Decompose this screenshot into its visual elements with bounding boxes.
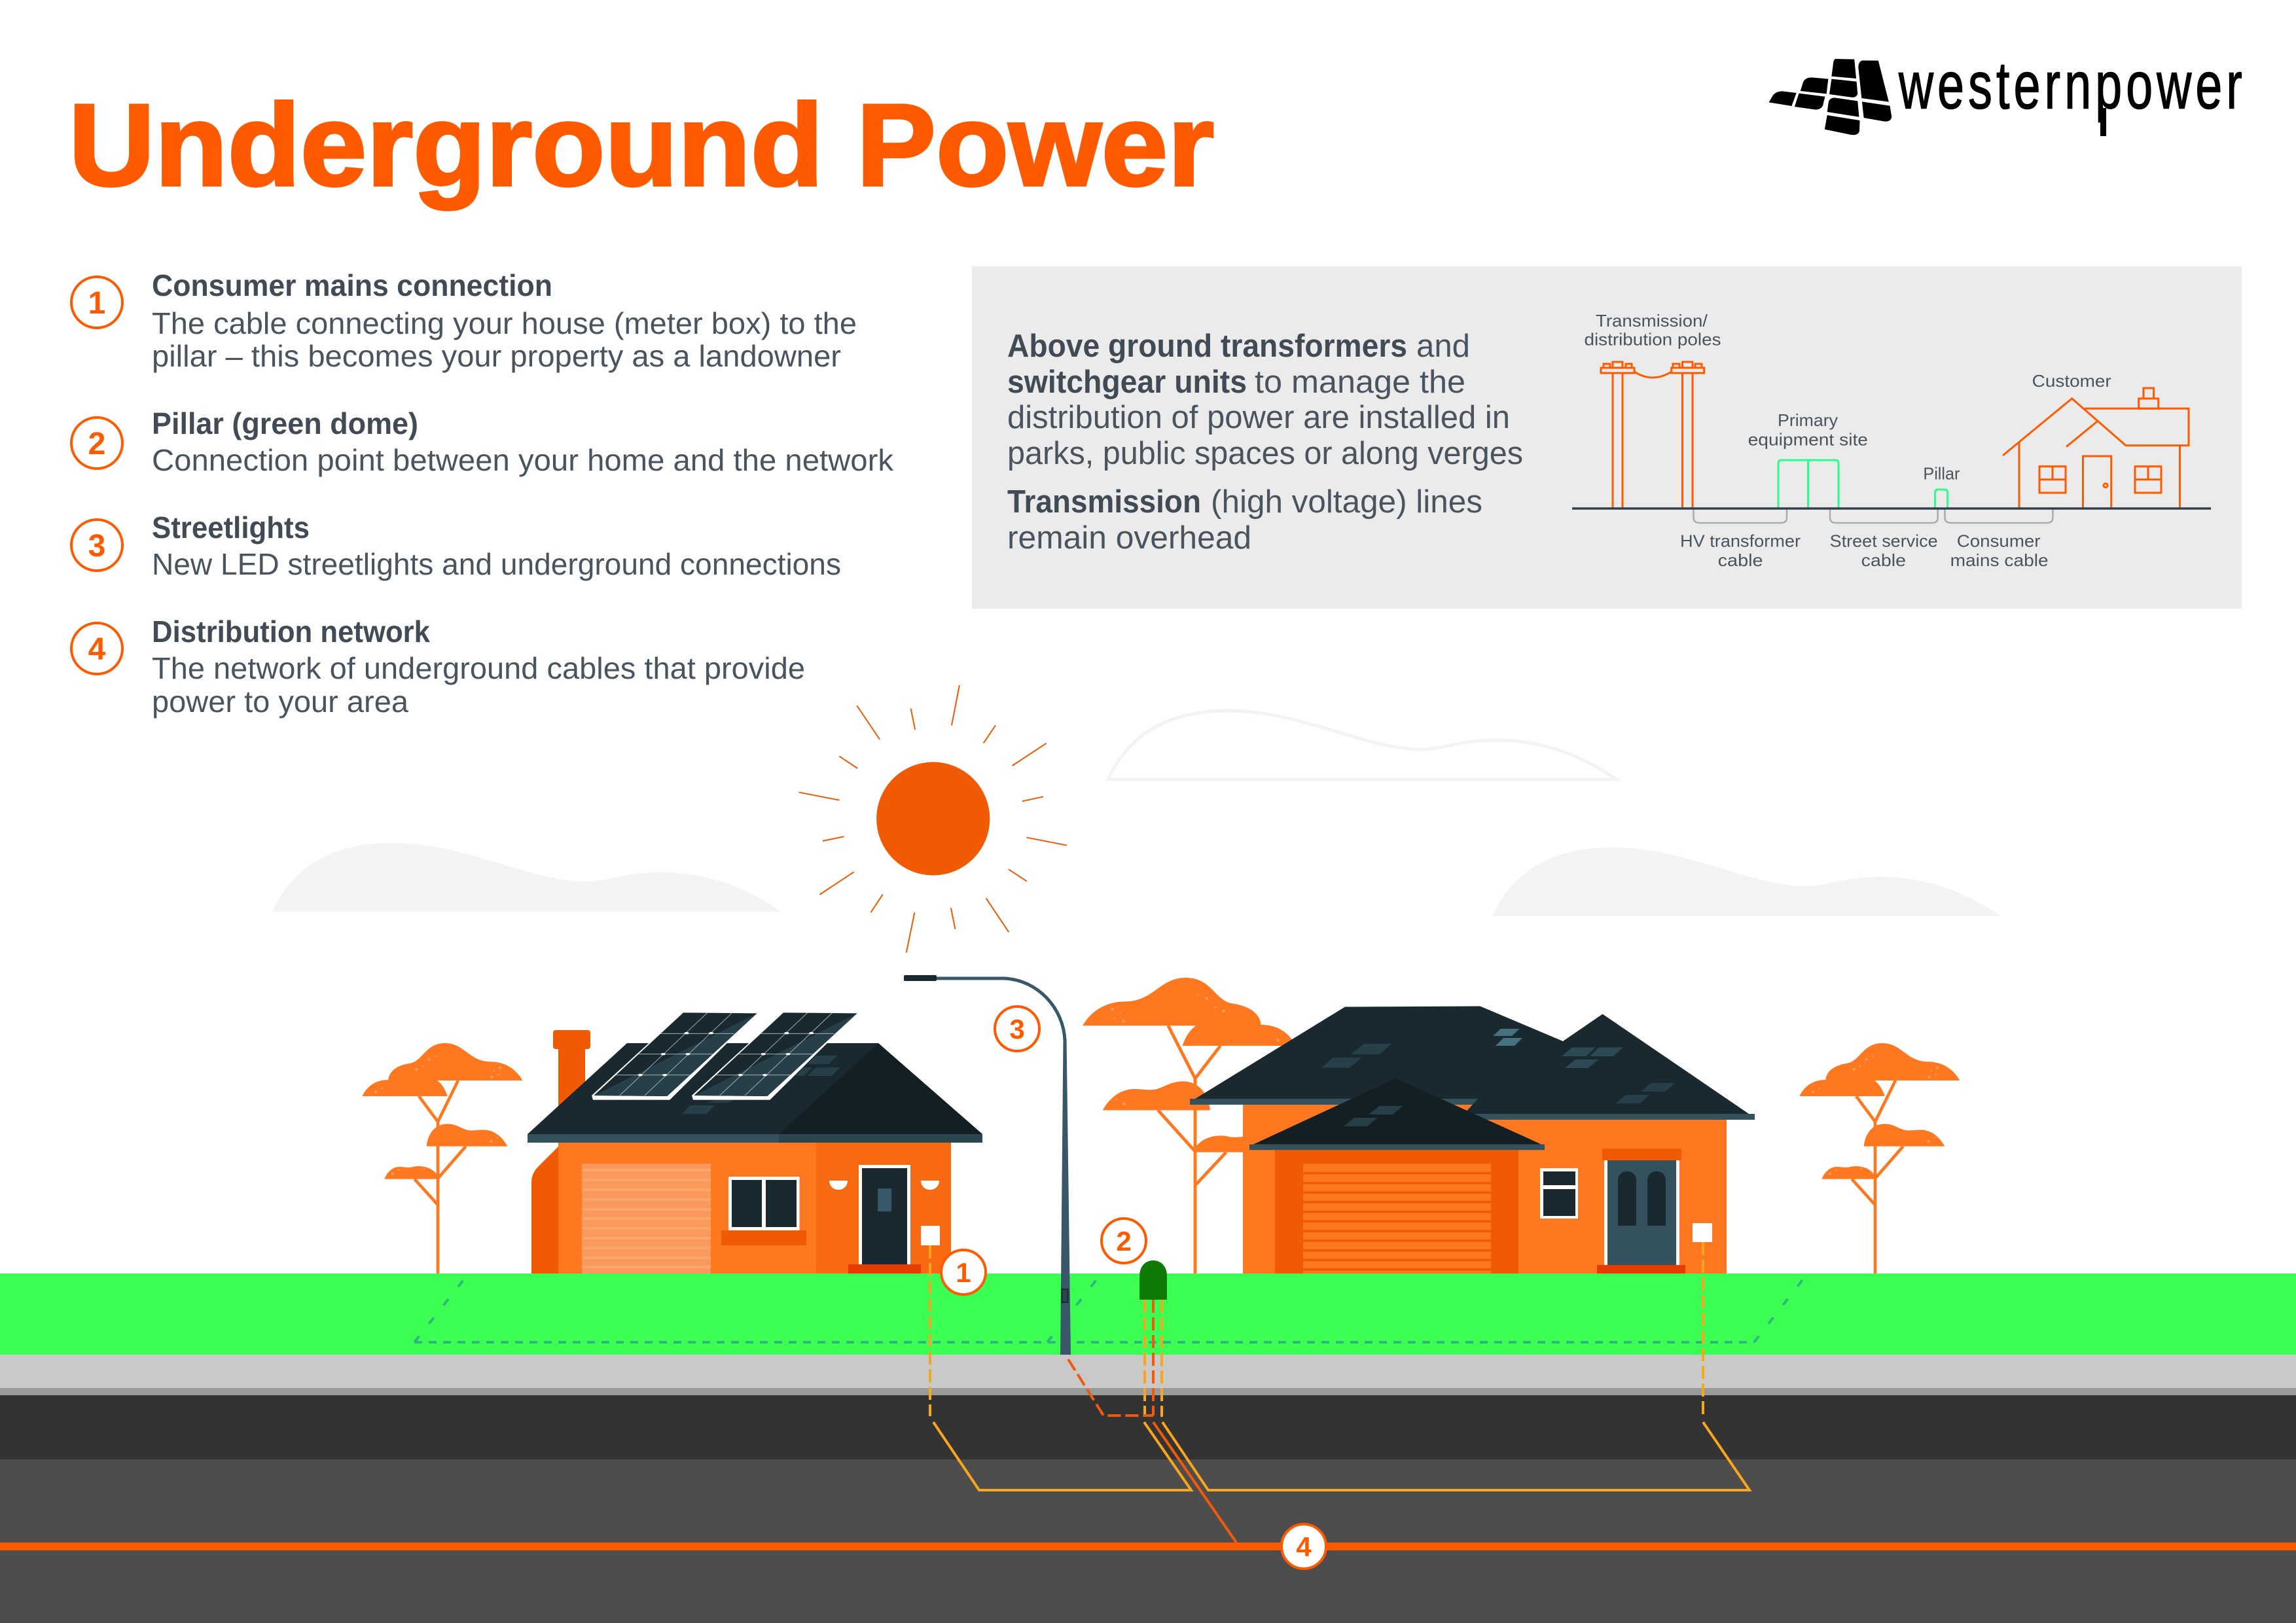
tree: middle xyxy=(1083,978,1296,1274)
panel text: remain overhead xyxy=(1007,520,1251,556)
callout 2: 2 xyxy=(1116,1226,1132,1257)
diagram labels: equipment site xyxy=(1748,430,1868,450)
door step xyxy=(848,1264,921,1274)
sun disc xyxy=(876,762,990,876)
legend item 2: 2 xyxy=(88,427,105,461)
panel text: Above ground transformers xyxy=(1007,329,1407,364)
diagram: ground line xyxy=(1572,507,2211,510)
lawn xyxy=(0,1274,2296,1355)
solar panels xyxy=(592,1012,857,1100)
legend item 3: New LED streetlights and underground connections xyxy=(152,547,841,581)
cable from right house xyxy=(1702,1242,1704,1417)
panel background xyxy=(972,266,2242,609)
gable roof xyxy=(1253,1079,1541,1145)
logo wordmark: westernpower xyxy=(1898,48,2242,123)
roof fascia shaded xyxy=(779,1134,982,1143)
legend item 3: Streetlights xyxy=(152,510,310,544)
cloud: outline xyxy=(1108,711,1617,779)
roof xyxy=(528,1043,982,1134)
legend item 1: The cable connecting your house (meter box) to the xyxy=(152,306,857,340)
gable fascia xyxy=(1249,1145,1545,1150)
diagram labels: Transmission/ xyxy=(1596,311,1708,330)
panel text xyxy=(1007,329,1523,556)
chimney xyxy=(553,1030,590,1113)
front door xyxy=(859,1165,910,1264)
legend item 3 xyxy=(71,510,841,581)
logo: western power xyxy=(1769,48,2242,136)
diagram labels: Customer xyxy=(2032,371,2111,391)
callout 2 xyxy=(1102,1219,1146,1263)
legend item 4: The network of underground cables that provide xyxy=(152,651,805,685)
roof tiles xyxy=(682,1056,840,1114)
panel text: (high voltage) lines xyxy=(1211,484,1482,520)
ground layers xyxy=(0,1274,2296,1623)
panel text: parks, public spaces or along verges xyxy=(1007,436,1523,471)
pillar dashes xyxy=(1145,1300,1162,1417)
legend item 2: Connection point between your home and the network xyxy=(152,443,894,477)
left side wall xyxy=(531,1147,558,1274)
callout 1 xyxy=(941,1250,986,1294)
streetlight pole xyxy=(1060,1039,1071,1355)
legend item 4: Distribution network xyxy=(152,615,430,649)
cloud: left xyxy=(272,843,781,912)
garage recess xyxy=(1275,1150,1518,1274)
pole hatch xyxy=(1062,1289,1068,1302)
legend item 1: pillar – this becomes your property as a landowner xyxy=(152,339,841,373)
lintel xyxy=(1602,1149,1681,1160)
panel text: switchgear units xyxy=(1007,365,1247,400)
window xyxy=(1540,1168,1578,1219)
panel text: and xyxy=(1416,329,1470,364)
distribution cable xyxy=(0,1543,2296,1550)
sun rays xyxy=(799,685,1067,953)
shaded wall xyxy=(816,1143,951,1274)
diagram labels: cable xyxy=(1861,550,1906,570)
panel text: Transmission xyxy=(1007,484,1201,520)
solar panel 1 xyxy=(592,1012,757,1100)
network diagram xyxy=(1572,311,2211,570)
tree: right xyxy=(1799,1043,1960,1274)
logo descender xyxy=(2100,108,2106,136)
wall lights xyxy=(829,1181,939,1190)
house: left xyxy=(528,1012,982,1274)
window xyxy=(728,1177,800,1230)
legend list xyxy=(71,268,894,719)
legend item 1: Consumer mains connection xyxy=(152,268,552,302)
front door xyxy=(1604,1160,1679,1265)
window box xyxy=(721,1230,806,1245)
legend item 4: power to your area xyxy=(152,685,408,719)
road surface xyxy=(0,1395,2296,1459)
meter box xyxy=(1693,1223,1712,1242)
panel text: distribution of power are installed in xyxy=(1007,400,1510,435)
diagram labels: mains cable xyxy=(1950,550,2049,570)
roof shade xyxy=(779,1043,982,1134)
callout 3: 3 xyxy=(1009,1014,1025,1044)
panel text: to manage the xyxy=(1255,365,1465,400)
main roof xyxy=(1195,1007,1749,1114)
garage door xyxy=(1303,1164,1491,1274)
legend item 2: Pillar (green dome) xyxy=(152,406,418,440)
footpath xyxy=(0,1355,2296,1388)
diagram: cable brackets xyxy=(1694,508,2053,523)
subsoil xyxy=(0,1459,2296,1623)
legend item 1 xyxy=(71,268,857,373)
diagram labels xyxy=(1584,311,2111,570)
diagram: customer house xyxy=(2003,388,2189,508)
cable from left house xyxy=(929,1245,931,1416)
diagram labels: cable xyxy=(1718,550,1763,570)
walls xyxy=(1243,1105,1727,1274)
garage door xyxy=(582,1164,711,1274)
front wall xyxy=(558,1143,816,1274)
gable tiles xyxy=(1344,1106,1403,1126)
house: right xyxy=(1190,1007,1755,1274)
diagram labels: Primary xyxy=(1778,410,1838,430)
right roof fascia xyxy=(1466,1114,1755,1120)
callout 4: 4 xyxy=(1296,1531,1312,1562)
diagram labels: Pillar xyxy=(1923,464,1960,484)
roof fascia xyxy=(528,1134,779,1143)
consumer mains cables xyxy=(930,1242,1749,1490)
roof tiles xyxy=(1322,1029,1675,1103)
diagram: pillar xyxy=(1935,490,1948,508)
tree: left xyxy=(362,1043,522,1274)
callout 1: 1 xyxy=(956,1257,971,1288)
diagram: poles xyxy=(1601,362,1704,508)
property boundary dashed lines xyxy=(414,1274,1806,1342)
kerb xyxy=(0,1388,2296,1395)
pillar: green dome xyxy=(1139,1260,1167,1300)
door step xyxy=(1597,1265,1685,1274)
streetlight head xyxy=(904,975,937,981)
solar panel 2 xyxy=(692,1012,857,1100)
logo icon xyxy=(1769,59,1892,135)
diagram: primary equipment site xyxy=(1778,460,1839,508)
panel: above ground info xyxy=(972,266,2242,609)
cloud: right xyxy=(1492,847,2001,916)
left roof fascia xyxy=(1190,1099,1478,1105)
sun xyxy=(799,685,1067,953)
diagram labels: HV transformer xyxy=(1680,531,1801,551)
streetlight xyxy=(904,975,1071,1355)
callout 3 xyxy=(995,1007,1039,1051)
legend item 3: 3 xyxy=(88,529,105,563)
pillar and streetlight cables xyxy=(1068,1300,1236,1543)
legend item 4 xyxy=(71,615,805,719)
diagram labels: distribution poles xyxy=(1584,330,1721,349)
diagram labels: Consumer xyxy=(1957,531,2041,551)
meter box xyxy=(921,1226,940,1245)
streetlight arm xyxy=(937,978,1065,1041)
callout 4 xyxy=(1282,1524,1326,1569)
diagram labels: Street service xyxy=(1830,531,1938,551)
title: Underground Power xyxy=(69,80,1214,210)
legend item 1: 1 xyxy=(88,286,105,321)
legend item 2 xyxy=(71,406,894,477)
legend item 4: 4 xyxy=(88,632,106,667)
